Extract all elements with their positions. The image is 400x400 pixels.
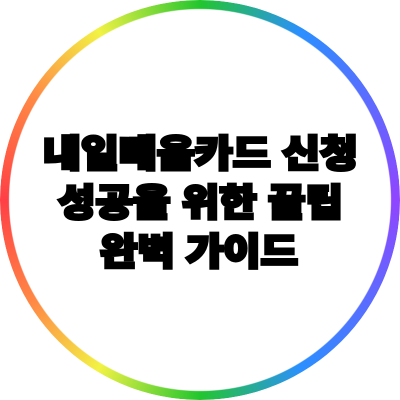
title: 성공을 위한 꿀팁 [58,182,343,224]
title: 내일배움카드 신청 [43,134,358,174]
title: 완벽 가이드 [100,232,298,272]
